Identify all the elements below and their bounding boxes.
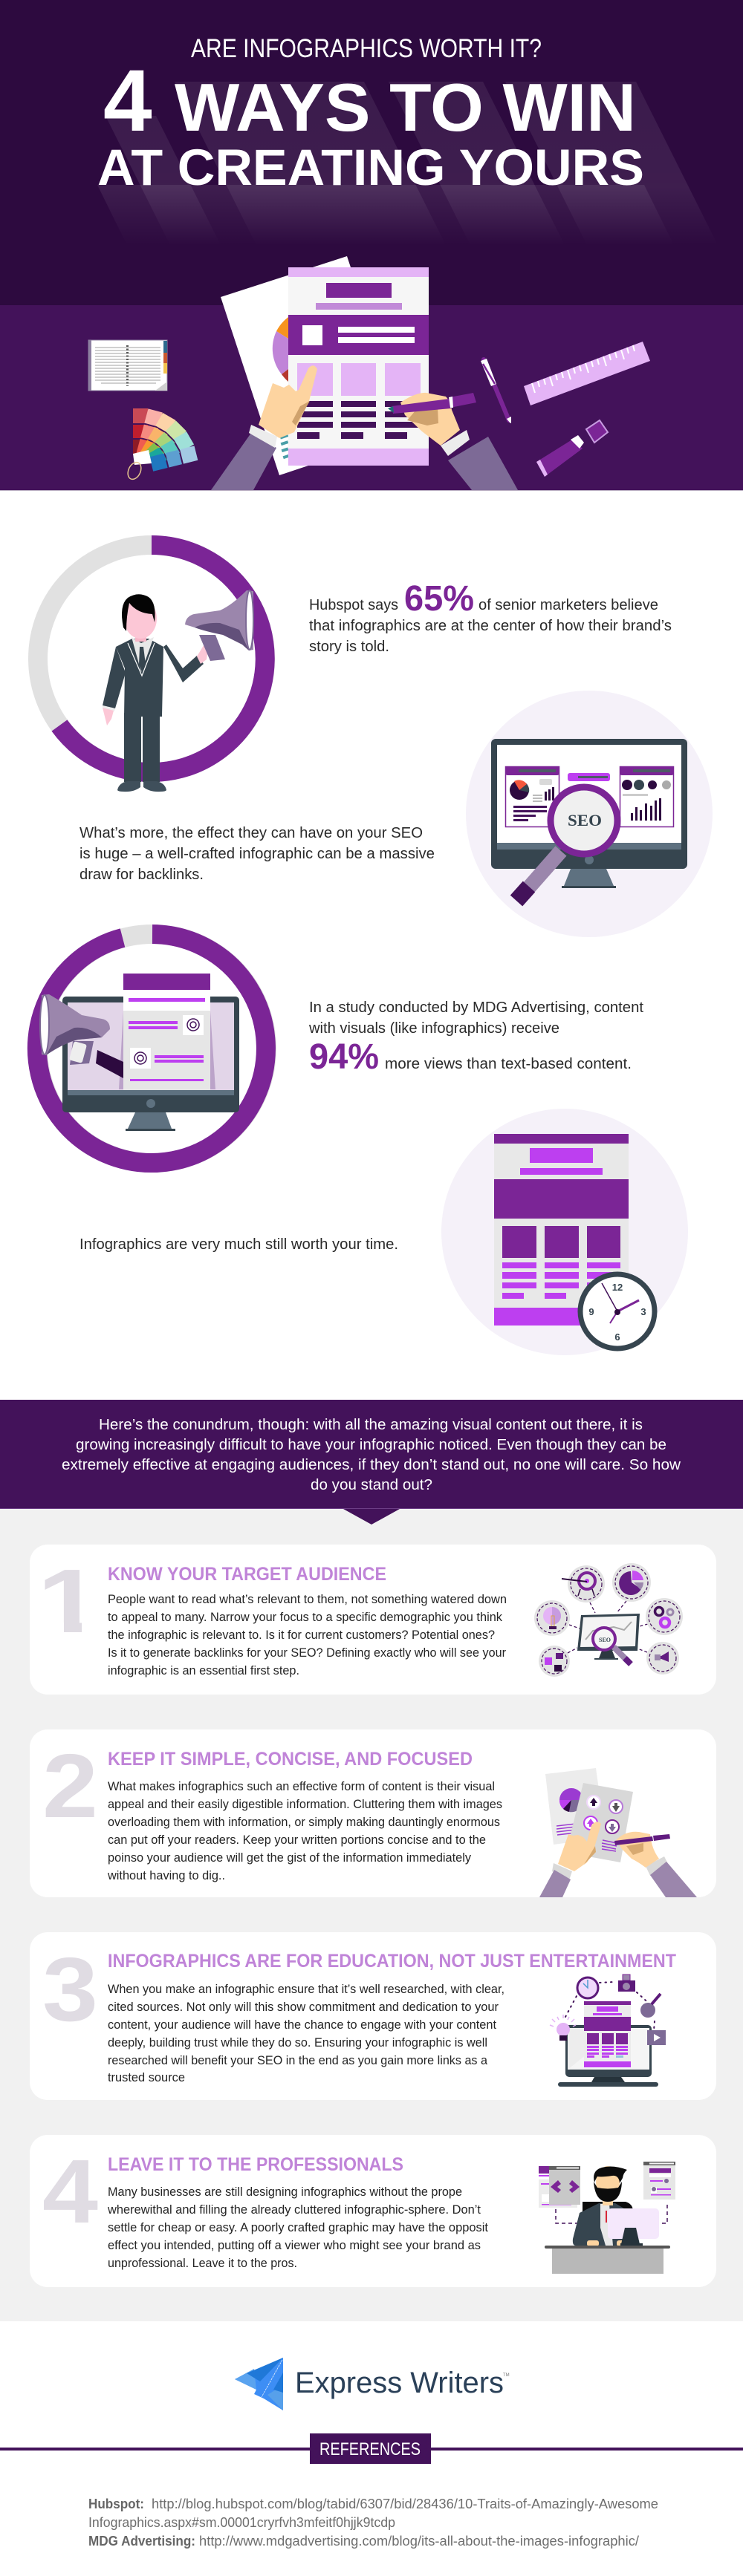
text: references xyxy=(88,2497,658,2549)
body text: poinso your audience will get the gist of the information immediately xyxy=(108,1851,471,1865)
title: WAYS TO WIN xyxy=(175,71,636,146)
illustration: designer at desk xyxy=(539,2162,675,2274)
icon: ruler xyxy=(524,342,650,405)
heading: KNOW YOUR TARGET AUDIENCE xyxy=(108,1564,386,1585)
text: references: MDG Advertising: xyxy=(88,2534,195,2549)
text: references: Infographics.aspx#sm.00001cryrfvh3mfeitf0hjjk9tcdp xyxy=(88,2515,395,2530)
figure: businessman with megaphone xyxy=(103,594,209,792)
title: 4 xyxy=(103,52,152,150)
heading: KEEP IT SIMPLE, CONCISE, AND FOCUSED xyxy=(108,1749,473,1770)
logo: Express Writers: Express Writers xyxy=(295,2367,504,2399)
icon: clock xyxy=(580,1274,655,1349)
icon: clock: 3 xyxy=(640,1306,646,1317)
icon: pen xyxy=(481,359,511,423)
text: Hubspot stat: of senior marketers believe xyxy=(478,597,658,613)
text: references: http://blog.hubspot.com/blog/tabid/6307/bid/28436/10-Traits-of-Amazingly-Awesome xyxy=(152,2497,658,2511)
text: worth your time: Infographics are very much still worth your time. xyxy=(80,1236,398,1253)
body text: Many businesses are still designing infographics without the prope xyxy=(108,2185,462,2199)
icon: megaphone with hand xyxy=(40,994,123,1078)
text: SEO: draw for backlinks. xyxy=(80,867,204,883)
panel: card 1 know your target audience xyxy=(30,1545,716,1695)
text: references: http://www.mdgadvertising.com/blog/its-all-about-the-images-infographic/ xyxy=(199,2534,639,2549)
illustration: monitor with clock camera bulb xyxy=(550,1975,666,2087)
illustration: SEO hub with icons xyxy=(534,1563,683,1677)
left hand pointing xyxy=(211,365,317,490)
body text: without having to dig.. xyxy=(107,1868,225,1882)
panel: 65% stat xyxy=(38,545,672,792)
body text: wherewithal and filling the already cluttered infographic-sphere. Don’t xyxy=(107,2202,481,2217)
text: Hubspot stat: that infographics are at the center of how their brand’s xyxy=(309,618,672,634)
body text: content, your audience will have the chance to engage with your content xyxy=(108,2018,496,2032)
icon: marker xyxy=(536,420,608,477)
body text: the infographic is relevant to. Is it for current customers? Potential ones? xyxy=(108,1628,495,1642)
body text: trusted source xyxy=(108,2070,185,2084)
text: Hubspot stat xyxy=(309,579,672,655)
body text: What makes infographics such an effective form of content is their visual xyxy=(108,1779,495,1793)
donut ring 94 percent xyxy=(37,934,267,1163)
illustration: SEO monitor xyxy=(466,691,713,937)
illustration: hands working on an infographic at a desk xyxy=(211,256,518,490)
text: conundrum: extremely effective at engaging audiences, if they don’t stand out, no one will care. So how xyxy=(62,1456,681,1473)
body text: cited sources. Not only will this show commitment and dedication to your xyxy=(108,2000,499,2014)
panel: SEO paragraph xyxy=(80,691,713,937)
body text: infographic is an essential first step. xyxy=(108,1663,299,1677)
heading: LEAVE IT TO THE PROFESSIONALS xyxy=(108,2154,403,2175)
text: MDG stat: with visuals (like infographics) receive xyxy=(308,1020,559,1037)
panel: card 2 keep it simple xyxy=(30,1729,716,1897)
text: Hubspot stat: story is told. xyxy=(309,639,389,655)
body text: deeply, building trust while they do so. Ensuring your infographic is well xyxy=(108,2035,487,2050)
icon: megaphone xyxy=(185,590,253,661)
text: SEO: is huge – a well-crafted infographic can be a massive xyxy=(80,846,435,862)
text: Hubspot stat: 65% xyxy=(404,579,474,619)
body text: effect you intended, putting off a viewer who might see your brand as xyxy=(108,2238,481,2252)
body text: settle for cheap or easy. A poorly crafted graphic may have the opposit xyxy=(108,2220,488,2234)
icon: magnifier: SEO xyxy=(568,811,602,829)
text: conundrum: growing increasingly difficult to have your infographic noticed. Even though they can be xyxy=(76,1436,666,1453)
heading: INFOGRAPHICS ARE FOR EDUCATION, NOT JUST ENTERTAINMENT xyxy=(108,1951,676,1972)
text: Hubspot stat: Hubspot says xyxy=(309,597,398,613)
icon: paper plane xyxy=(235,2358,283,2410)
body text: People want to read what’s relevant to them, not something watered down xyxy=(108,1592,507,1606)
logo: Express Writers: TM xyxy=(503,2373,510,2378)
body text: overloading them with information, or simply making dauntingly enormous xyxy=(108,1815,500,1829)
heading: references xyxy=(0,2433,743,2464)
right hand with pen xyxy=(388,393,518,490)
body text: can put off your readers. Keep your written portions concise and to the xyxy=(108,1833,486,1847)
title: ARE INFOGRAPHICS WORTH IT? xyxy=(191,34,542,63)
illustration: SEO hub with icons: SEO xyxy=(599,1637,611,1643)
body text: Is it to generate backlinks for your SEO? Defining exactly who will see your xyxy=(108,1646,506,1660)
panel: card 4 professionals xyxy=(30,2135,716,2287)
number 4: 4 xyxy=(42,2141,98,2242)
text: SEO xyxy=(80,825,435,883)
body text: researched will benefit your SEO in the end as you gain more links as a xyxy=(108,2053,488,2067)
illustration: hands on papers xyxy=(539,1768,697,1897)
body text xyxy=(108,1982,504,2084)
number 2: 2 xyxy=(42,1735,98,1836)
body text: When you make an infographic ensure that it’s well researched, with clear, xyxy=(108,1982,504,1996)
logo: Express Writers xyxy=(235,2358,510,2410)
donut ring 65 percent xyxy=(38,545,265,772)
panel: worth your time xyxy=(80,1109,688,1355)
body text: appeal and their easily digestible information. Cluttering them with images xyxy=(108,1797,502,1811)
title xyxy=(97,34,644,196)
icon: clock: 12 xyxy=(612,1282,623,1293)
body text xyxy=(108,1592,507,1677)
panel: conundrum banner xyxy=(0,1400,743,2321)
icon: colour swatch fan xyxy=(126,408,198,481)
back paper with pie chart xyxy=(221,256,357,475)
text: conundrum xyxy=(62,1416,681,1493)
body text xyxy=(107,1779,502,1882)
text: MDG stat: 94% xyxy=(309,1037,379,1077)
text: MDG stat: more views than text-based content. xyxy=(385,1056,632,1072)
icon: magnifier xyxy=(516,787,617,901)
heading: references: REFERENCES xyxy=(319,2439,421,2459)
title: AT CREATING YOURS xyxy=(97,139,644,196)
text: conundrum: Here’s the conundrum, though: with all the amazing visual content out there, it is xyxy=(99,1416,643,1433)
illustration: monitor with document and megaphone xyxy=(40,974,239,1131)
number 1: 1 xyxy=(37,1551,100,1651)
panel: header background xyxy=(0,0,743,491)
icon: clock: 6 xyxy=(614,1331,620,1343)
icon: notebook xyxy=(88,340,167,391)
text: MDG stat xyxy=(308,1000,643,1077)
text: references: Hubspot: xyxy=(88,2497,144,2511)
illustration: infographic layout and clock xyxy=(441,1109,688,1355)
panel: 94% stat xyxy=(37,934,643,1163)
chart windows xyxy=(505,766,674,827)
front document xyxy=(288,267,429,466)
panel: card 3 education xyxy=(30,1932,716,2100)
body text: unprofessional. Leave it to the pros. xyxy=(108,2256,297,2270)
body text: to appeal to many. Narrow your focus to a specific demographic you think xyxy=(108,1610,502,1624)
text: conundrum: do you stand out? xyxy=(311,1476,432,1493)
body text xyxy=(107,2185,488,2270)
text: SEO: What’s more, the effect they can have on your SEO xyxy=(80,825,423,841)
icon: clock: 9 xyxy=(588,1306,594,1317)
text: MDG stat: In a study conducted by MDG Advertising, content xyxy=(309,1000,643,1016)
number 3: 3 xyxy=(42,1939,98,2040)
